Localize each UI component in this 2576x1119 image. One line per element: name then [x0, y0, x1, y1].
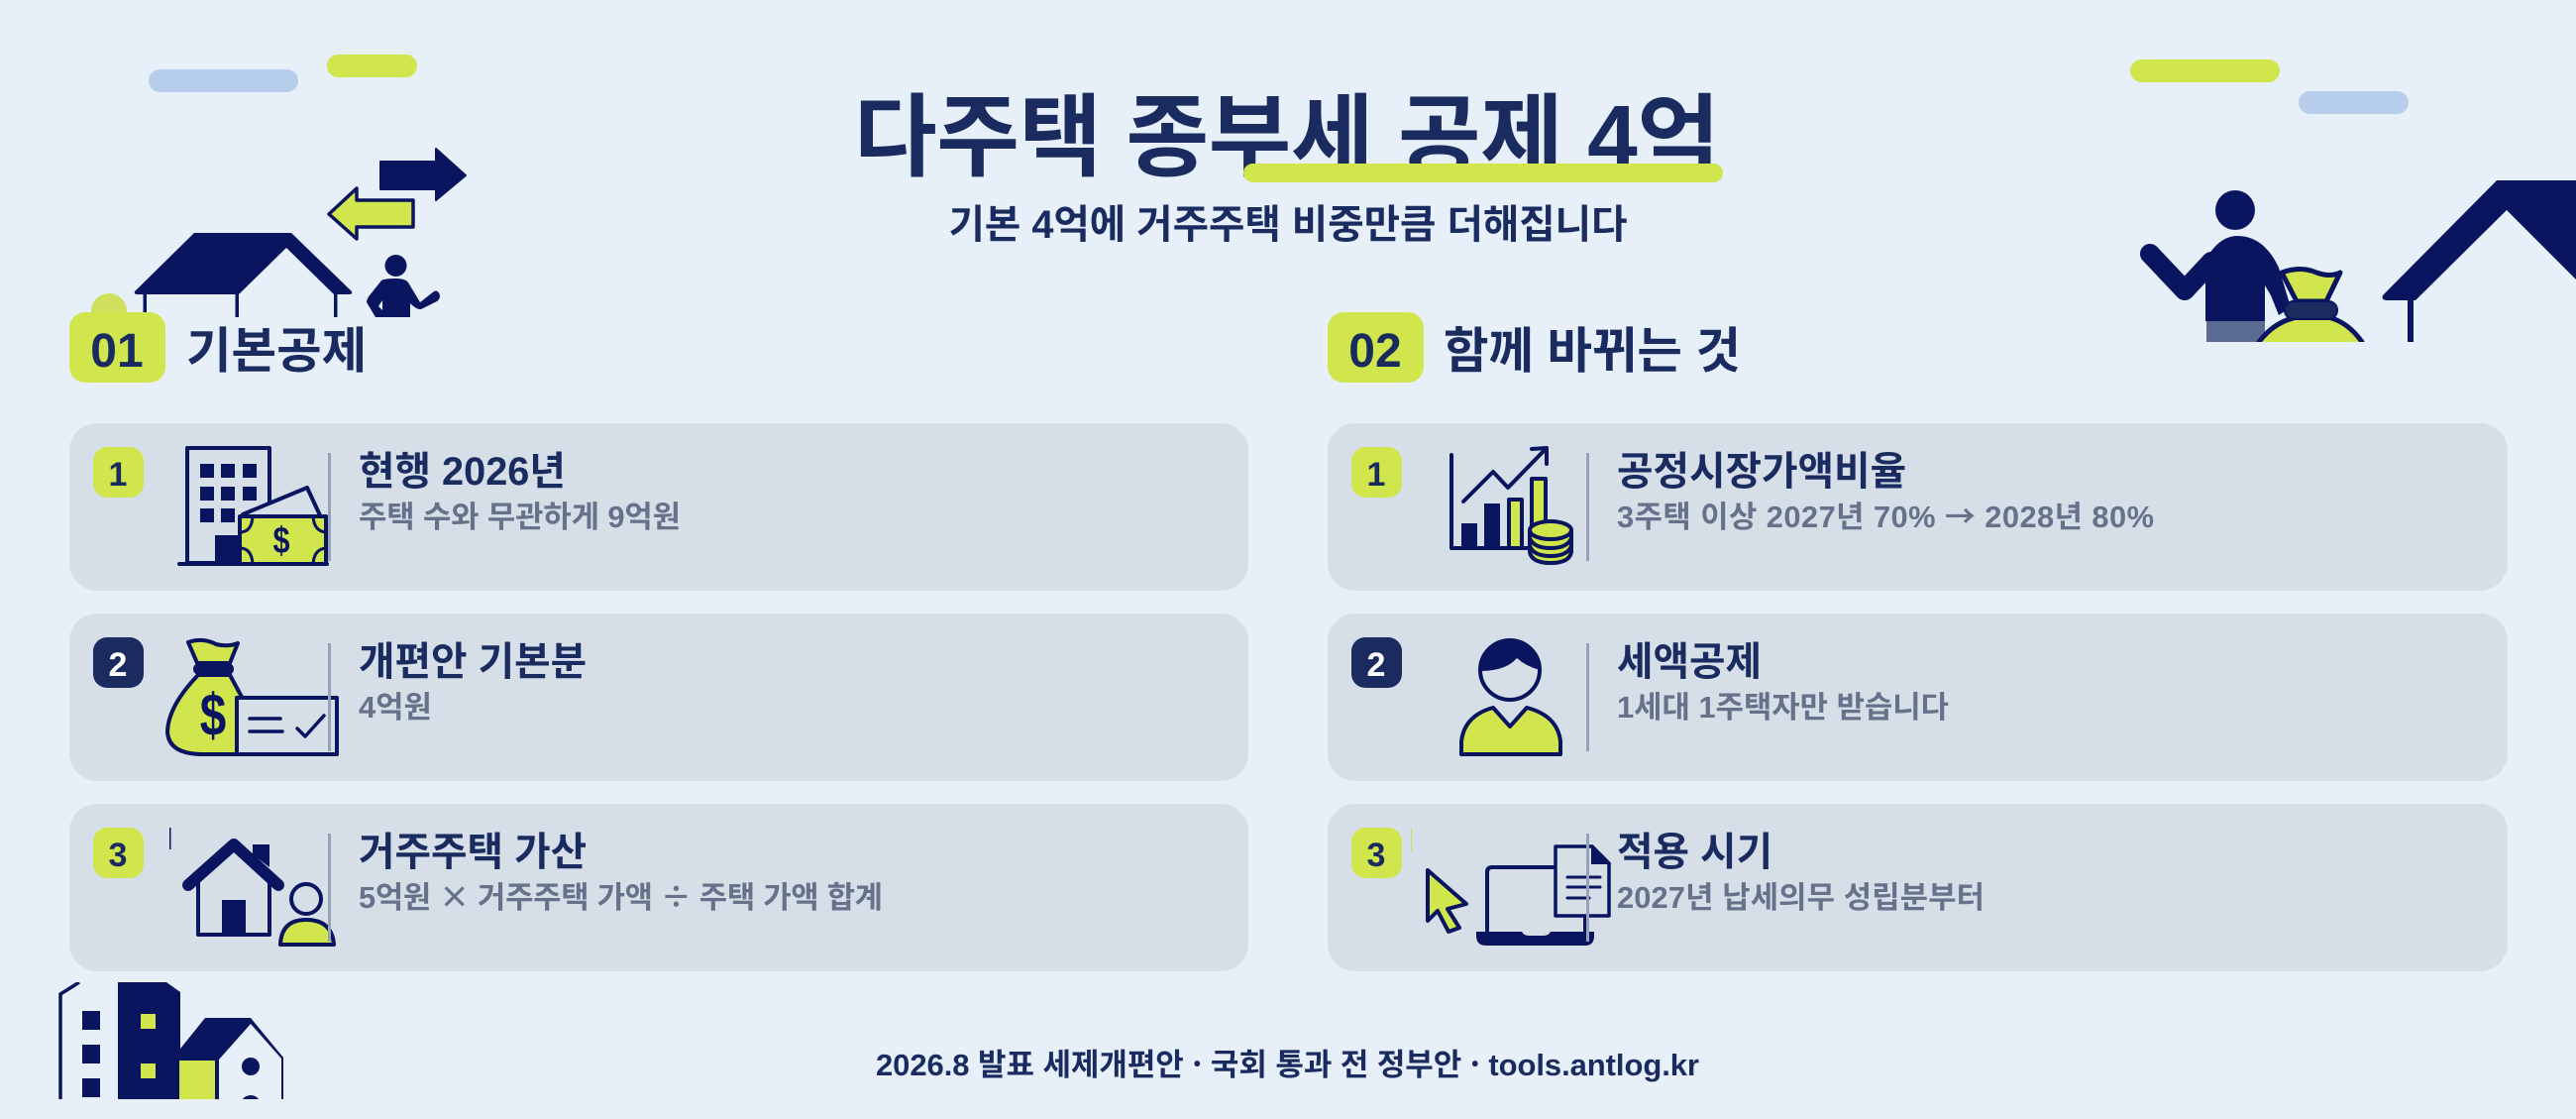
- section heading: 01: 01: [90, 325, 144, 378]
- section heading: 02: 함께 바뀌는 것: [1444, 324, 1741, 379]
- badge 2: [1351, 637, 1402, 688]
- badge 3: [1351, 828, 1402, 878]
- arrow: left: [329, 188, 413, 239]
- description: 5억원 × 거주주택 가액 ÷ 주택 가액 합계: [359, 872, 883, 917]
- section heading: 02: [1328, 312, 1741, 383]
- description: 2027년 납세의무 성립분부터: [1617, 880, 1985, 915]
- badge 2: 2: [109, 646, 127, 684]
- badge 2: 2: [1367, 646, 1385, 684]
- arrow: right: [380, 149, 466, 200]
- description: 1세대 1주택자만 받습니다: [1617, 690, 1949, 725]
- panel: 공정시장가액비율: [1328, 423, 2508, 591]
- panel: 적용 시기: [1328, 804, 2508, 971]
- icon: building and banknote: [179, 448, 327, 564]
- badge 3: 3: [109, 837, 127, 874]
- icon: person: [2150, 190, 2291, 342]
- illustration: bottom left city: [58, 982, 283, 1099]
- heading: 세액공제: [1617, 640, 1762, 684]
- divider: [328, 453, 331, 561]
- icon: person: [367, 255, 440, 317]
- section heading: 01: 기본공제: [186, 324, 367, 379]
- badge 1: [1351, 447, 1402, 498]
- pill: lime: [2130, 59, 2280, 82]
- divider: [1586, 834, 1589, 942]
- section heading: 02: 02: [1348, 325, 1402, 378]
- icon: money bag and cheque: $: [200, 682, 226, 748]
- pill: blue: [149, 69, 298, 92]
- icon: person: [1461, 640, 1560, 754]
- footer: 2026.8 발표 세제개편안 · 국회 통과 전 정부안 · tools.antlog.kr: [876, 1040, 1699, 1084]
- icon: money bag and cheque: [167, 640, 337, 754]
- heading: 개편안 기본분: [359, 640, 587, 684]
- panel: 개편안 기본분: [69, 614, 1248, 781]
- panel: 세액공제: [1328, 614, 2508, 781]
- illustration: top right decorations: [2130, 59, 2576, 357]
- divider: [328, 834, 331, 942]
- section heading: 01: [69, 293, 367, 383]
- icon: chart and coins: [1451, 448, 1571, 563]
- icon: house roof: [2383, 180, 2576, 342]
- subtitle: 기본 4억에 거주주택 비중만큼 더해집니다: [949, 203, 1627, 247]
- divider: [1586, 643, 1589, 751]
- pill: blue: [2299, 91, 2409, 114]
- description: 주택 수와 무관하게 9억원: [359, 500, 681, 534]
- icon: building and banknote: $: [272, 520, 290, 562]
- divider: [1586, 453, 1589, 561]
- heading: 거주주택 가산: [359, 831, 587, 874]
- heading: 현행 2026년: [359, 450, 566, 494]
- illustration: top left decorations: [135, 55, 466, 317]
- badge 1: 1: [1367, 456, 1385, 494]
- panel: 현행 2026년: [69, 423, 1248, 591]
- title underline: [1243, 164, 1723, 182]
- badge 1: [93, 447, 144, 498]
- icon: house roof: [135, 233, 352, 317]
- heading: 공정시장가액비율: [1617, 450, 1906, 494]
- badge 3: 3: [1367, 837, 1385, 874]
- badge 2: [93, 637, 144, 688]
- icon: money bag: [2259, 270, 2362, 357]
- icon: cursor, laptop and document: [1428, 846, 1609, 946]
- icon: house and owner: [188, 844, 334, 945]
- badge 3: [93, 828, 144, 878]
- badge 1: 1: [109, 456, 127, 494]
- description: 3주택 이상 2027년 70% → 2028년 80%: [1617, 492, 2154, 536]
- title: 다주택 종부세 공제 4억: [854, 88, 1720, 188]
- heading: 적용 시기: [1617, 831, 1772, 874]
- description: 4억원: [359, 690, 432, 725]
- panel: 거주주택 가산: [69, 804, 1248, 971]
- pill: lime: [327, 55, 417, 77]
- divider: [328, 643, 331, 751]
